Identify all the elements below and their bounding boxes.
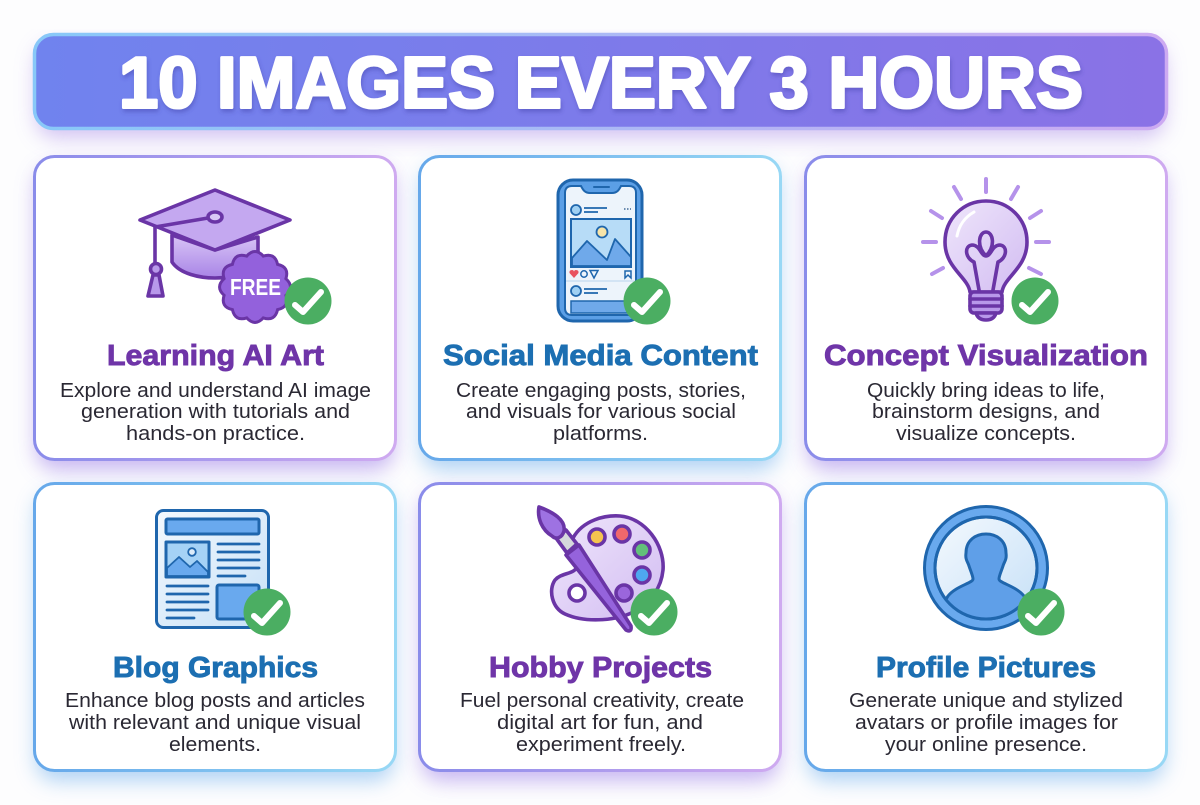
description: visualize concepts. bbox=[896, 423, 1076, 445]
icon: graduation cap with free badge bbox=[140, 190, 332, 324]
description bbox=[867, 380, 1105, 445]
description: elements. bbox=[169, 734, 261, 756]
description: Enhance blog posts and articles bbox=[65, 690, 365, 712]
description bbox=[65, 690, 365, 756]
description: your online presence. bbox=[885, 734, 1087, 756]
heading: Learning AI Art bbox=[107, 340, 324, 372]
heading: Blog Graphics bbox=[113, 652, 318, 684]
icon: paint palette and brush bbox=[539, 507, 678, 636]
icon: blog page bbox=[156, 510, 290, 636]
panel: Concept Visualization bbox=[806, 156, 1166, 470]
description bbox=[849, 690, 1123, 756]
description: digital art for fun, and bbox=[497, 712, 703, 734]
description bbox=[60, 380, 371, 445]
description bbox=[460, 690, 744, 756]
header banner bbox=[34, 34, 1166, 138]
icon: phone with social post bbox=[558, 180, 670, 324]
description bbox=[456, 380, 746, 445]
heading: Social Media Content bbox=[443, 340, 758, 372]
panel: Social Media Content bbox=[420, 156, 780, 470]
description: Fuel personal creativity, create bbox=[460, 690, 744, 712]
description: Generate unique and stylized bbox=[849, 690, 1123, 712]
panel: Learning AI Art bbox=[34, 156, 396, 470]
description: generation with tutorials and bbox=[81, 401, 350, 423]
icon: profile avatar bbox=[924, 506, 1064, 636]
description: Explore and understand AI image bbox=[60, 380, 371, 402]
panel: Hobby Projects bbox=[420, 484, 780, 781]
description: hands-on practice. bbox=[126, 423, 305, 445]
description: Create engaging posts, stories, bbox=[456, 380, 746, 402]
description: Quickly bring ideas to life, bbox=[867, 380, 1105, 402]
heading: Profile Pictures bbox=[876, 652, 1096, 684]
icon: graduation cap with free badge: FREE bbox=[230, 274, 281, 300]
description: platforms. bbox=[553, 423, 648, 445]
panel: Profile Pictures bbox=[806, 484, 1166, 781]
description: brainstorm designs, and bbox=[872, 401, 1100, 423]
heading: Hobby Projects bbox=[489, 652, 712, 684]
heading: Concept Visualization bbox=[824, 340, 1148, 372]
icon: light bulb bbox=[923, 179, 1058, 324]
panel: Blog Graphics bbox=[34, 484, 396, 781]
description: with relevant and unique visual bbox=[68, 712, 361, 734]
description: experiment freely. bbox=[516, 734, 686, 756]
description: and visuals for various social bbox=[466, 401, 736, 423]
title: 10 IMAGES EVERY 3 HOURS bbox=[119, 44, 1083, 124]
description: avatars or profile images for bbox=[855, 712, 1118, 734]
